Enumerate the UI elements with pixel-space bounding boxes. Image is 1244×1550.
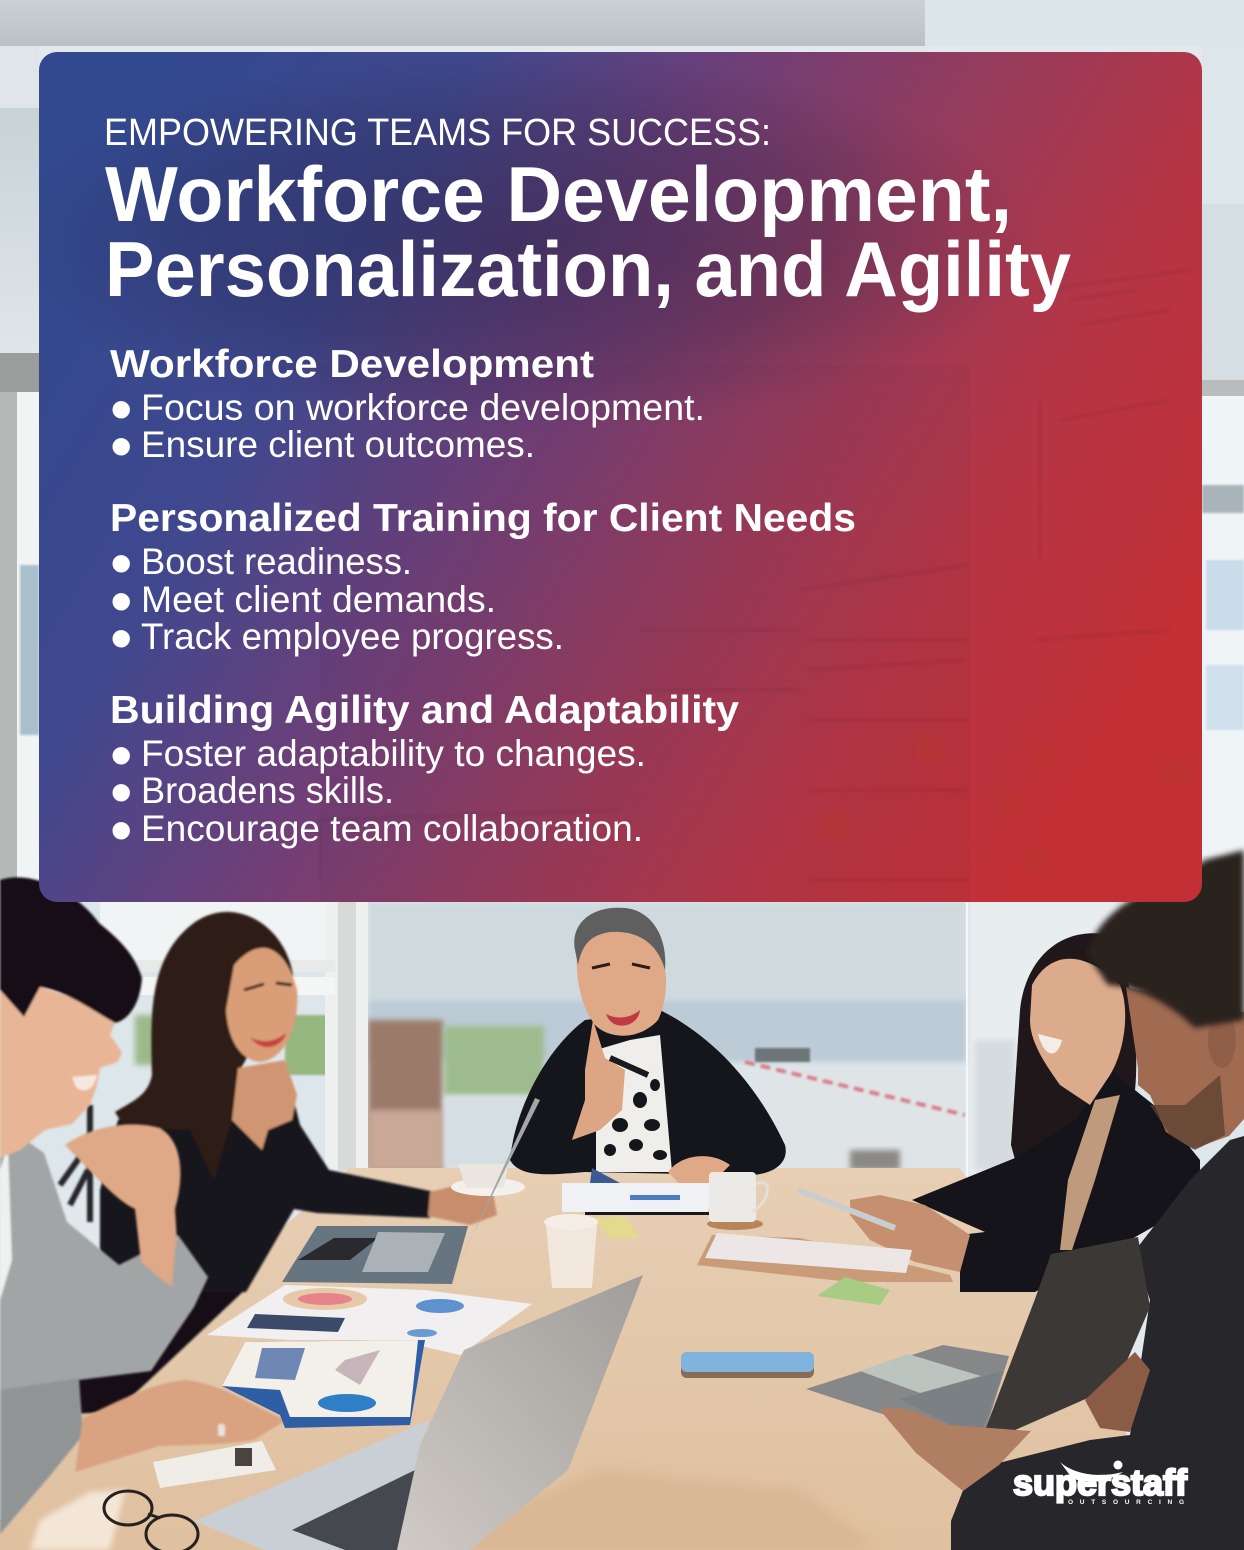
open laptop at the top [282,1098,540,1284]
clipboard with line chart [222,1340,425,1428]
section: agility and adaptability: Building Agility and Adaptability [110,689,739,732]
faint whiteboard texture [320,270,1190,905]
woman on the left in black blazer [70,912,497,1414]
section: agility and adaptability: • [110,756,132,828]
window frame [130,902,968,1182]
gradient text panel [39,52,1202,905]
logo dot [1114,1460,1122,1470]
section: agility and adaptability: • [110,719,132,791]
coffee cup and saucer [451,1164,525,1196]
section: personalized training: • [110,565,132,637]
man on the right in dark suit [806,850,1244,1550]
logo: superstaff outsourcing: superstaff [1013,1462,1188,1503]
section: workforce development: • [110,410,132,482]
blue phone [681,1352,814,1378]
laptop held by the man [806,1237,1150,1446]
section: agility and adaptability: • [110,794,132,866]
section: workforce development: Ensure client outcomes. [141,424,535,465]
section: agility and adaptability [110,689,739,866]
section: personalized training: Track employee progress. [141,616,564,657]
man on the left in grey cardigan [0,877,286,1534]
heading: eyebrow: EMPOWERING TEAMS FOR SUCCESS: [104,112,771,154]
section: workforce development: Workforce Development [110,343,594,386]
woman on the right laughing in black blazer [798,933,1200,1292]
window view behind the team [0,900,1244,1190]
woman in the center with polka dot blouse [510,908,786,1195]
document clipboard center [562,1168,712,1215]
charts papers [207,1285,532,1355]
heading: main title: Personalization, and Agility [105,225,1071,313]
logo: superstaff outsourcing: OUTSOURCING [1068,1499,1184,1506]
logo swoosh [1060,1462,1123,1482]
chair frame [60,1105,92,1222]
front silver laptop [194,1275,643,1550]
eyeglasses [104,1491,198,1550]
green sticky note [817,1277,890,1305]
section: agility and adaptability: Broadens skills. [141,770,394,811]
items on the table [104,1098,953,1550]
paper coffee cup [544,1214,598,1288]
section: workforce development: Focus on workforce development. [141,387,705,428]
section: personalized training: Personalized Training for Client Needs [110,497,856,540]
section: workforce development [110,343,705,482]
section: workforce development: • [110,373,132,445]
section: agility and adaptability: Foster adaptability to changes. [141,733,646,774]
section: personalized training: • [110,527,132,599]
sticky notes [590,1216,640,1238]
white mug on coaster [707,1172,768,1230]
section: personalized training: Meet client demands. [141,579,496,620]
heading: main title: Workforce Development, [105,150,1012,238]
conference table [0,1168,1130,1550]
section: agility and adaptability: Encourage team collaboration. [141,808,643,849]
calculator [153,1441,276,1488]
tablet and clipboard right [697,1233,953,1282]
section: personalized training: Boost readiness. [141,541,412,582]
section: personalized training: • [110,602,132,674]
heading: main title [105,150,1071,313]
section: personalized training [110,497,856,674]
